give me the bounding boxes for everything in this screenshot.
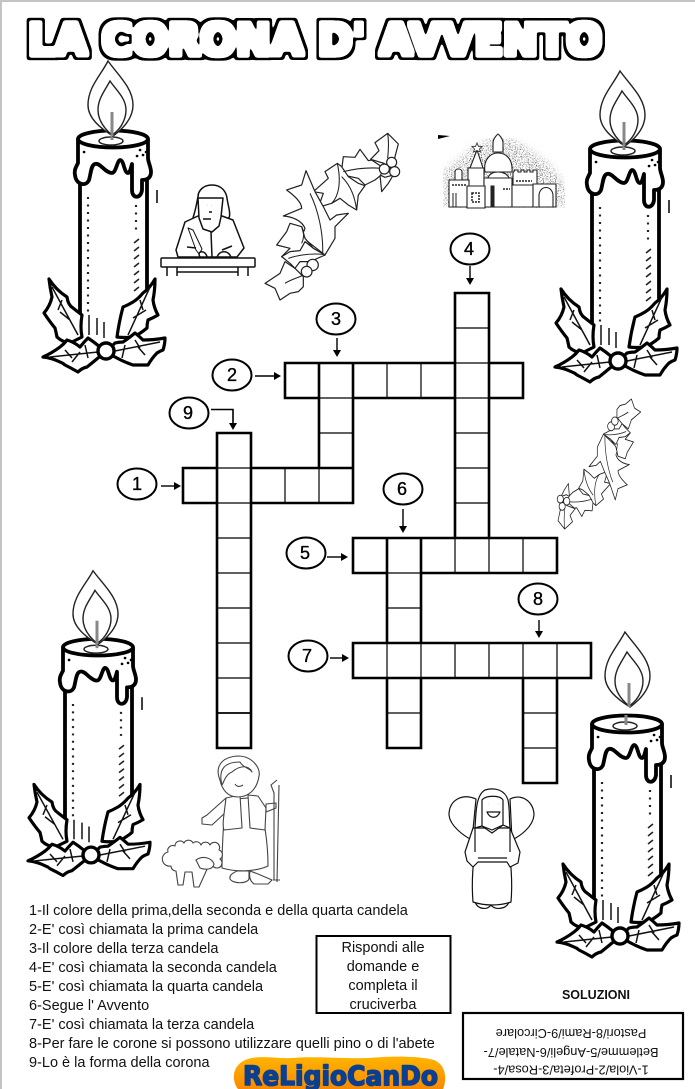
number marker 9: 9 — [183, 403, 193, 423]
number marker 4: 4 — [464, 239, 474, 259]
icon: holly branch right — [557, 399, 641, 529]
number marker 3 — [316, 304, 356, 357]
clue list: 2-E' così chiamata la prima candela — [29, 922, 259, 938]
icon: prophet writing — [161, 185, 255, 276]
solutions box — [463, 1013, 683, 1079]
solutions box: 1-Viola/2-Profeta/3-Rosa/4- — [493, 1062, 649, 1078]
clue list: 7-E' così chiamata la terza candela — [29, 1017, 255, 1033]
clue list — [29, 903, 435, 1071]
instruction box: completa il — [348, 978, 418, 994]
number marker 2: 2 — [227, 365, 237, 385]
number marker 9 — [170, 398, 237, 430]
clue list: 1-Il colore della prima,della seconda e della quarta candela — [29, 903, 409, 919]
instruction box: Rispondi alle — [341, 940, 425, 956]
number marker 1: 1 — [132, 474, 142, 494]
instruction box — [316, 936, 450, 1013]
icon: candle bottom right — [557, 632, 679, 957]
number marker 2 — [212, 360, 281, 390]
instruction box: cruciverba — [350, 997, 417, 1013]
clue list: 9-Lo è la forma della corona — [29, 1055, 210, 1071]
crossword grid — [183, 293, 591, 783]
solutions box: Pastori/8-Rami/9-Circolare — [496, 1026, 646, 1041]
number marker 6: 6 — [397, 479, 407, 499]
number marker 1 — [118, 468, 181, 500]
icon: shepherd with sheep — [162, 756, 280, 887]
number marker 5 — [286, 538, 348, 568]
number marker 4 — [450, 234, 490, 285]
icon: candle bottom left — [28, 571, 150, 876]
clue list: 6-Segue l' Avvento — [29, 998, 149, 1014]
clue list: 5-E' così chiamata la quarta candela — [29, 979, 264, 995]
icon: candle top left — [43, 61, 165, 372]
icon: Bethlehem city — [438, 134, 565, 208]
solutions heading: SOLUZIONI — [562, 988, 630, 1002]
icon: candle top right — [555, 71, 677, 382]
number marker 7 — [288, 640, 349, 672]
icon: holly branch top — [265, 133, 400, 300]
clue list: 4-E' così chiamata la seconda candela — [29, 960, 278, 976]
title: LA CORONA D' AVVENTO — [28, 15, 602, 66]
number marker 5: 5 — [300, 543, 310, 563]
number marker 3: 3 — [331, 309, 341, 329]
clue list: 8-Per fare le corone si possono utilizzare quelli pino o di l'abete — [29, 1036, 435, 1052]
number marker 8: 8 — [533, 589, 543, 609]
clue list: 3-Il colore della terza candela — [29, 941, 219, 957]
instruction box: domande e — [347, 959, 419, 975]
number marker 6 — [384, 474, 422, 533]
solutions box: Betlemme/5-Angeli/6-Natale/7- — [484, 1045, 658, 1060]
icon: angel — [449, 789, 534, 908]
number marker 8 — [518, 584, 558, 638]
number marker 7: 7 — [302, 646, 312, 666]
